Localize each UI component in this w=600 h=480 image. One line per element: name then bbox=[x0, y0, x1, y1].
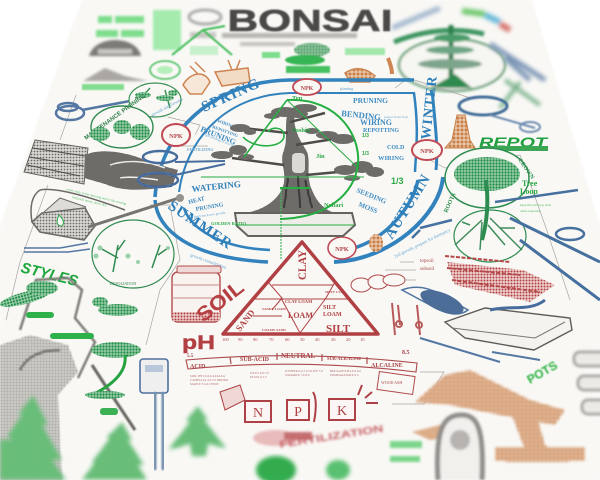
green notes bbox=[66, 187, 552, 213]
gray statue bbox=[437, 415, 482, 480]
microprint notes: growth and flowers bbox=[150, 96, 184, 117]
soil triangle chart: LOAM bbox=[288, 311, 313, 320]
pH scale: POMEGRANATE 6.5 bbox=[330, 373, 359, 377]
crown loop labels: CROWN bbox=[516, 158, 535, 181]
season: spring: SPRING bbox=[199, 76, 263, 116]
top left history panel bbox=[83, 10, 357, 81]
microprint notes: growth consolidation bbox=[190, 252, 228, 270]
central bonsai tree bbox=[211, 104, 384, 212]
outer seasonal rings bbox=[155, 80, 443, 262]
seasonal task labels: PRUNING bbox=[353, 96, 388, 105]
soil triangle chart: 90 bbox=[238, 337, 243, 342]
panel: defoliation circle bbox=[92, 220, 174, 288]
soil title: SOIL bbox=[193, 276, 249, 327]
npk fertilization tiles: N bbox=[253, 406, 263, 421]
soil triangle chart: 70 bbox=[269, 337, 274, 342]
soil pH meter bbox=[140, 359, 168, 393]
seasonal task labels: PRUNING bbox=[199, 125, 237, 147]
fertilization plant bbox=[253, 430, 312, 446]
microprint notes: planting bbox=[340, 86, 353, 91]
glove and hand bbox=[24, 140, 178, 190]
microprint notes: protect from frost bbox=[384, 115, 408, 119]
microprint notes: pinch back new growth bbox=[194, 211, 226, 219]
bonsai pot bbox=[235, 213, 355, 236]
meter probes bbox=[155, 392, 163, 470]
seasonal task labels: MOSS bbox=[357, 200, 379, 215]
pots stack bbox=[574, 352, 600, 414]
blue scoop bbox=[402, 285, 468, 319]
orange tools and pots bbox=[183, 58, 392, 94]
NPK stamp winter bbox=[412, 140, 442, 160]
orange broom bbox=[445, 115, 475, 148]
tree annotations: Ten bbox=[292, 95, 303, 102]
lime note: WOOD ASH bbox=[381, 380, 402, 385]
seasonal task labels: FERTILIZING bbox=[187, 147, 214, 152]
blue wire ring bbox=[459, 97, 540, 132]
pH scale: pH bbox=[182, 333, 215, 354]
soil triangle chart: 10 bbox=[360, 337, 365, 342]
NPK stamp autumn: NPK bbox=[335, 246, 349, 253]
green ratios bbox=[362, 133, 404, 186]
tree annotations: GOLDEN RATIO bbox=[211, 221, 247, 226]
pH scale: 5.5 bbox=[187, 354, 194, 359]
bonsai tray bbox=[445, 300, 572, 350]
big green pine circle bbox=[394, 25, 505, 91]
seasonal task labels: COLD bbox=[387, 145, 405, 151]
soil fractions bbox=[351, 274, 405, 292]
bottom green shrubs bbox=[256, 456, 350, 480]
green notes: water early in the morning and in the evening bbox=[66, 187, 127, 206]
leaf cutter tool bbox=[24, 243, 90, 252]
green pine trees foreground bbox=[0, 395, 226, 480]
soil triangle chart: 40 bbox=[315, 337, 320, 342]
seasonal task labels: WIRING bbox=[360, 118, 392, 127]
crown loop labels: Tree bbox=[522, 179, 538, 188]
green notes: keep soil moist, never dry bbox=[72, 195, 107, 209]
blue repotting tools bbox=[412, 190, 600, 300]
soil layers red bbox=[420, 256, 555, 302]
NPK stamp winter: NPK bbox=[420, 148, 434, 155]
pH scale bbox=[182, 333, 417, 386]
top center green bonsai bbox=[262, 43, 385, 73]
blue scissors top left bbox=[56, 101, 130, 120]
seasonal task labels: WATERING bbox=[191, 179, 241, 194]
microprint notes: 2nd growth, prepare for dormancy bbox=[393, 227, 452, 260]
seasonal task labels: WIRING bbox=[378, 155, 404, 162]
soil triangle chart: 30 bbox=[331, 337, 336, 342]
soil triangle chart: 80 bbox=[253, 337, 258, 342]
season: summer: SUMMER bbox=[165, 198, 235, 253]
red root diagrams bbox=[392, 303, 422, 335]
pH scale: SOIL PH 5.0-6.0 AZALEA bbox=[190, 374, 226, 378]
pots title: POTS bbox=[524, 358, 560, 387]
soil triangle chart: 100 bbox=[222, 337, 230, 342]
crown loop labels: ROOTS bbox=[443, 192, 458, 214]
pH scale: 8.5 bbox=[402, 350, 410, 356]
green notes: keep the soil loop clear bbox=[520, 203, 552, 207]
fertilization title: FERTILIZATION bbox=[279, 424, 384, 451]
NPK stamp autumn bbox=[328, 237, 356, 259]
crown loop labels bbox=[443, 158, 538, 214]
green diagram top bbox=[82, 26, 232, 90]
golden ratio spiral overlay bbox=[201, 100, 364, 260]
soil triangle chart: 20 bbox=[346, 337, 351, 342]
crown loop labels: Loop bbox=[520, 187, 538, 196]
connector lines bbox=[6, 78, 570, 404]
green bottom labels bbox=[390, 441, 422, 462]
soil layers red: subsoil bbox=[420, 267, 435, 272]
soil triangle chart: CLAY bbox=[295, 250, 309, 280]
seasonal task labels: REPOTTING bbox=[212, 124, 239, 138]
pH scale: JUNIPER 6.0-7.0 OLIVE 7.0 bbox=[285, 369, 323, 373]
tree annotations: Nebari bbox=[324, 202, 343, 209]
pH scale: NEUTRAL bbox=[281, 352, 316, 360]
seasonal task labels: HEAT bbox=[188, 196, 206, 206]
panel: maintenance pruning circle: MAINTENANCE PRUNING bbox=[84, 93, 147, 142]
pH scale: FICUS 6.0-7.0 bbox=[250, 371, 269, 375]
pH scale: BOUGAINVILLEA 6.0 bbox=[330, 369, 361, 373]
soil layers red: topsoil bbox=[420, 259, 434, 264]
soil triangle chart: LOAM bbox=[323, 312, 342, 318]
soil triangle chart: 60 bbox=[285, 337, 290, 342]
season: autumn: AUTUMN bbox=[382, 171, 434, 242]
scissors in hand bbox=[138, 151, 225, 187]
microprint notes bbox=[150, 86, 452, 270]
lime note bbox=[377, 372, 415, 394]
foliage clusters bbox=[211, 104, 384, 181]
soil jar bbox=[172, 266, 221, 322]
npk fertilization tiles: P bbox=[294, 405, 302, 420]
panel: defoliation circle: DEFOLIATION bbox=[110, 281, 136, 286]
soil triangle chart: SILT bbox=[323, 305, 336, 311]
pH scale: SUB-ALKALINE bbox=[327, 356, 361, 361]
green ratios: 1/3 bbox=[362, 151, 369, 157]
seasonal task labels: PRUNING bbox=[195, 202, 224, 213]
soil triangle chart: SAND bbox=[234, 307, 257, 333]
orange bonsai foreground bbox=[412, 370, 585, 462]
pH scale: ELM 6.0-7.5 bbox=[250, 375, 267, 379]
tree annotations: Jin bbox=[316, 153, 325, 160]
pH scale: ALCALINE bbox=[371, 363, 403, 369]
season: winter: WINTER bbox=[419, 75, 441, 140]
microprint notes: light pruning of new shoots bbox=[204, 132, 240, 150]
soil triangle chart bbox=[222, 242, 378, 342]
gray cliff and rocks bbox=[0, 278, 135, 480]
panel: tree root circle bbox=[445, 148, 529, 262]
watering can bbox=[31, 189, 184, 240]
green ratios: 1/3 bbox=[391, 176, 404, 186]
soil triangle chart: LOAMY SAND bbox=[262, 328, 286, 332]
seasonal task labels: BENDING bbox=[341, 108, 382, 122]
seasonal task labels: WIRING bbox=[217, 118, 236, 129]
tree annotations bbox=[211, 95, 343, 226]
NPK stamp top: NPK bbox=[301, 86, 314, 92]
soil triangle chart: CLAY LOAM bbox=[285, 299, 313, 304]
NPK stamp top bbox=[293, 79, 321, 95]
pH scale: TAMARIX 7.0-8.0 bbox=[285, 373, 310, 377]
styles title: STYLES bbox=[19, 259, 80, 290]
soil triangle chart: SANDY LOAM bbox=[262, 307, 286, 311]
pH scale: CAMELLIA 4.5-5.5 RHODO bbox=[190, 378, 229, 382]
soil triangle chart: 50 bbox=[300, 337, 305, 342]
green ratios: 1/3 bbox=[362, 133, 369, 139]
seasonal task labels: REPOTTING bbox=[363, 128, 399, 134]
tree annotations: Jushin bbox=[292, 127, 311, 134]
seasonal task labels bbox=[187, 96, 405, 215]
npk fertilization tiles bbox=[220, 385, 378, 422]
color bars and blue scissors top right bbox=[392, 8, 545, 108]
pH scale: ACID bbox=[190, 364, 206, 370]
NPK stamp spring: NPK bbox=[169, 133, 183, 140]
repot title: REPOT bbox=[479, 134, 549, 150]
green cascade styles bbox=[0, 281, 141, 415]
soil triangle chart: SILTY CLAY bbox=[325, 290, 346, 294]
panel: leaf pruning circle bbox=[129, 83, 181, 117]
repot title bbox=[479, 134, 549, 151]
green notes: when repotting bbox=[520, 209, 541, 213]
rake tool bbox=[420, 338, 540, 362]
seasonal task labels: SEEDING bbox=[355, 186, 388, 206]
orange root ball bbox=[369, 234, 383, 252]
NPK stamp spring bbox=[162, 124, 190, 146]
soil triangle chart: SILT bbox=[326, 323, 351, 335]
pH scale: SUB-ACID bbox=[240, 357, 270, 363]
npk fertilization tiles: K bbox=[337, 404, 347, 419]
pH scale: MAPLE 5.5-6.5 PINE bbox=[190, 382, 219, 386]
title: BONSAI bbox=[228, 3, 392, 38]
